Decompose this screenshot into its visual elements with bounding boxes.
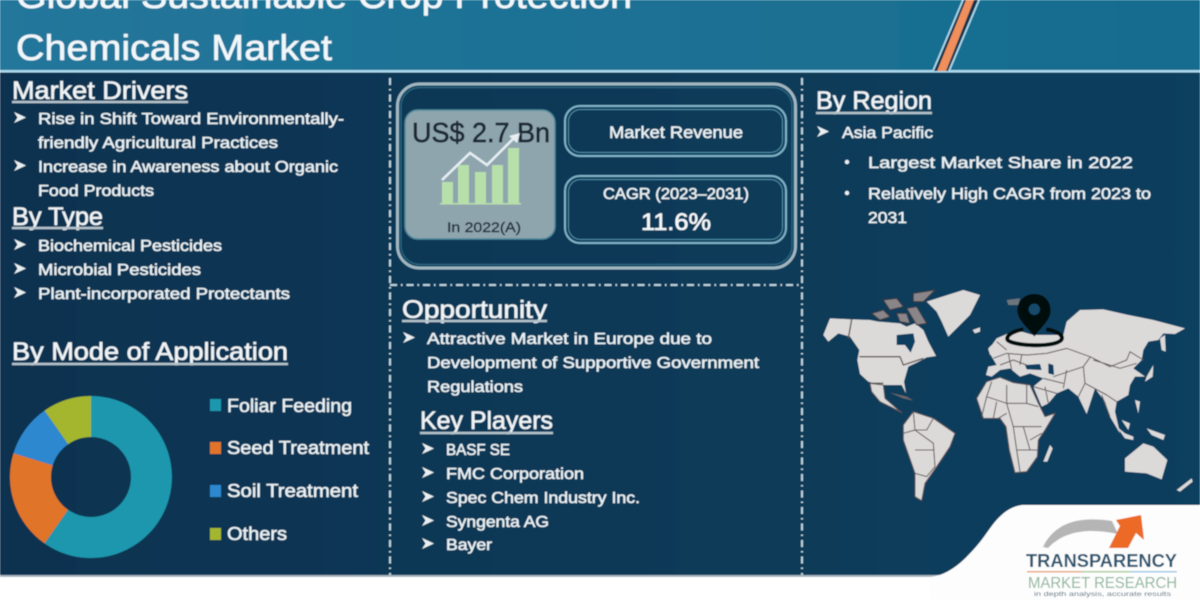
- market value card: US$ 2.7 Bn: [412, 117, 550, 148]
- panel: by type: Biochemical Pesticides: [38, 238, 222, 255]
- panel: key players: Spec Chem Industry Inc.: [446, 490, 640, 507]
- chart legend: [210, 396, 369, 544]
- panel: market drivers: Market Drivers: [12, 77, 188, 105]
- chart legend: Seed Treatment: [227, 438, 369, 458]
- title: [16, 0, 632, 68]
- panel: by region: 2031: [868, 210, 907, 227]
- header band: [0, 0, 1200, 72]
- donut chart: [10, 396, 172, 558]
- north america: [823, 318, 936, 393]
- panel: by region: Largest Market Share in 2022: [868, 155, 1133, 172]
- panel: by region: By Region: [816, 87, 932, 115]
- panel: by region: [816, 87, 1151, 227]
- panel: opportunity: Opportunity: [402, 296, 548, 324]
- panel: market drivers: friendly Agricultural Practices: [38, 135, 278, 152]
- CAGR box: 11.6%: [641, 209, 711, 236]
- islands and oceania: [1125, 443, 1167, 479]
- panel: opportunity: [402, 296, 760, 396]
- panel: key players: Bayer: [446, 537, 493, 554]
- south america: [903, 412, 955, 501]
- panel: by type: Microbial Pesticides: [38, 262, 201, 279]
- market revenue box: [565, 106, 786, 156]
- europe and asia: [986, 309, 1185, 433]
- panel: opportunity: Attractive Market in Europe due to: [427, 331, 712, 348]
- panel: by type: By Type: [12, 203, 103, 231]
- chart legend: Others: [227, 524, 287, 544]
- market revenue box: Market Revenue: [609, 123, 743, 142]
- logo: transparency market research: MARKET RESEARCH: [1028, 575, 1177, 592]
- chart legend: Foliar Feeding: [227, 396, 352, 416]
- panel: by type: [12, 203, 290, 303]
- market value card: [405, 110, 555, 239]
- panel: key players: BASF SE: [446, 442, 510, 459]
- panel: key players: Key Players: [420, 407, 553, 435]
- panel: key players: FMC Corporation: [446, 466, 584, 483]
- market value card: In 2022(A): [447, 219, 521, 235]
- panel: market drivers: [12, 77, 344, 200]
- panel: key players: [420, 407, 640, 554]
- logo: transparency market research: [930, 505, 1200, 600]
- panel: opportunity: Regulations: [427, 379, 523, 396]
- icon: location pin: [1007, 294, 1062, 345]
- panel: market size frame: [398, 84, 796, 268]
- chart legend: Soil Treatment: [227, 481, 358, 501]
- panel: key players: Syngenta AG: [446, 514, 549, 531]
- panel: market drivers: Increase in Awareness about Organic: [38, 159, 338, 176]
- dashed panel dividers: [390, 78, 802, 575]
- CAGR box: CAGR (2023–2031): [603, 186, 749, 203]
- panel: by type: Plant-incorporated Protectants: [38, 286, 290, 303]
- panel: by region: Relatively High CAGR from 2023 to: [868, 186, 1151, 203]
- logo: transparency market research: TRANSPARENCY: [1026, 551, 1177, 571]
- panel: market drivers: Rise in Shift Toward Environmentally-: [38, 111, 344, 128]
- CAGR box: [565, 176, 786, 243]
- logo: transparency market research: in depth analysis, accurate results: [1034, 592, 1171, 598]
- panel: market drivers: Food Products: [38, 183, 154, 200]
- title: Chemicals Market: [16, 27, 332, 68]
- heading: by mode of application: By Mode of Application: [12, 338, 288, 366]
- africa: [977, 377, 1055, 473]
- panel: by region: Asia Pacific: [842, 125, 933, 142]
- world map: [823, 290, 1193, 501]
- footer band: [0, 575, 1200, 600]
- panel: opportunity: Development of Supportive Government: [427, 355, 760, 372]
